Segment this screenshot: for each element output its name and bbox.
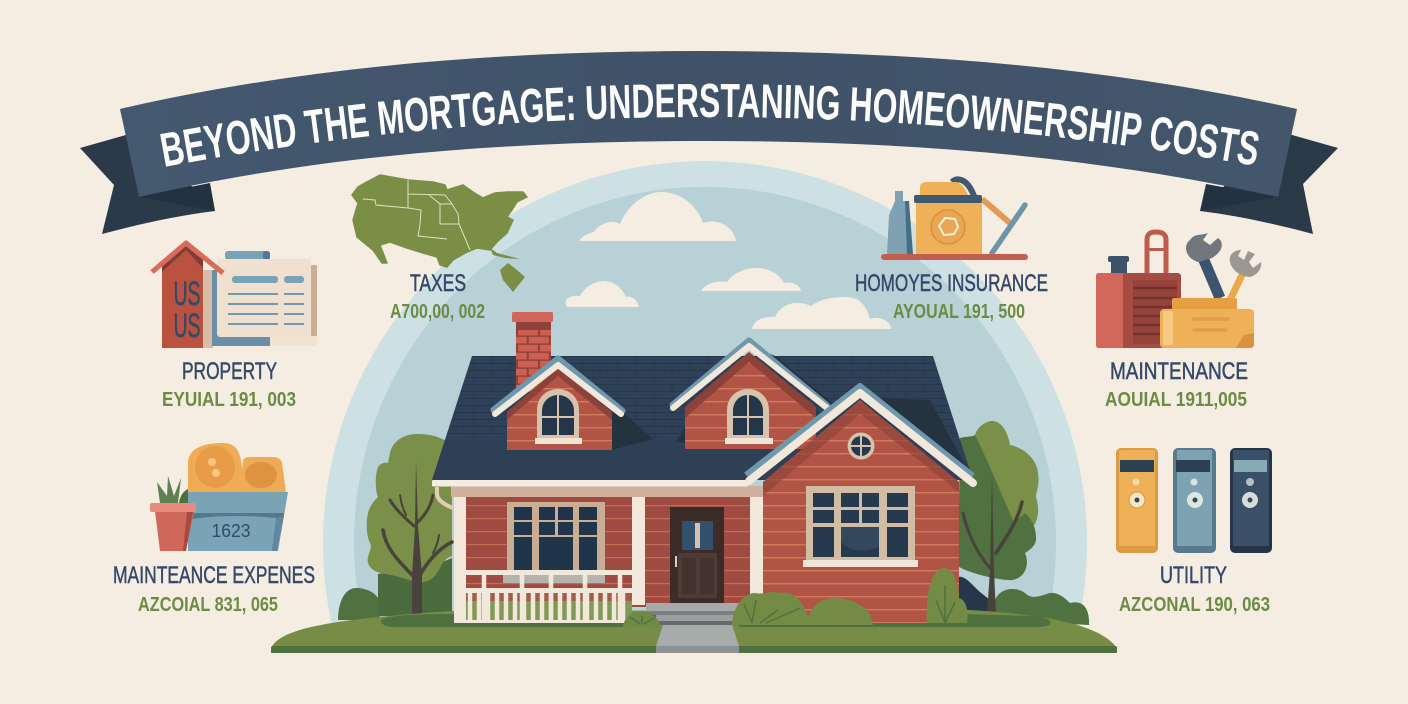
small shrub (623, 612, 660, 627)
heading: UTILITY (1160, 562, 1227, 589)
left ribbon tail (80, 131, 215, 234)
heading: TAXES (410, 270, 466, 297)
ground (271, 610, 1117, 653)
house (432, 312, 973, 625)
right ribbon tail (1200, 131, 1338, 234)
porch posts (454, 497, 763, 623)
cloud 3 (701, 268, 801, 291)
front shrubs (623, 568, 968, 627)
green bushes (995, 589, 1089, 625)
heading: PROPERTY (182, 358, 277, 385)
meter yellow (1116, 448, 1158, 553)
text: taxes (390, 270, 485, 323)
tree crown (367, 434, 452, 582)
porch wall (466, 497, 751, 607)
value: AZCOIAL 831, 065 (138, 594, 278, 616)
icon: utility meters (1116, 448, 1272, 553)
cloud 2 (566, 281, 639, 307)
heading: HOMOYES INSURANCE (855, 270, 1048, 297)
far bush (338, 588, 380, 620)
meter navy (1230, 448, 1272, 553)
value: AZCONAL 190, 063 (1119, 594, 1270, 616)
gable window (803, 486, 918, 567)
gable trim (746, 386, 973, 483)
text: maintenance (1105, 358, 1248, 411)
right tree and bushes (958, 421, 1089, 625)
box number: 1623 (212, 521, 250, 541)
value: AYOUAL 191, 500 (893, 301, 1025, 323)
round window (848, 432, 874, 460)
tall shrub (927, 568, 968, 623)
walkway (656, 625, 739, 653)
clouds (566, 192, 891, 329)
porch railing (454, 570, 644, 623)
left dormer (494, 359, 622, 450)
gable wall (763, 400, 959, 623)
roof (432, 356, 973, 480)
steps (646, 603, 741, 625)
chimney (512, 312, 553, 392)
value: AOUIAL 1911,005 (1105, 389, 1247, 411)
value: A700,00, 002 (390, 301, 485, 323)
dark foliage (378, 558, 452, 616)
title: BEYOND THE MORTGAGE: UNDERSTANING HOMEOWNERSHIP COSTS (160, 84, 1259, 167)
navy bush (958, 577, 990, 615)
right dormer window (725, 389, 773, 444)
left dormer window (535, 389, 582, 444)
value: EYUIAL 191, 003 (162, 389, 296, 411)
light crown (975, 421, 1039, 530)
banner body (120, 51, 1297, 197)
icon: property (152, 243, 317, 348)
text: expenses (113, 562, 315, 616)
icon: map (352, 175, 527, 292)
door (670, 507, 724, 603)
heading: MAINTEANCE EXPENES (113, 562, 315, 589)
right dormer (673, 341, 827, 449)
tree trunk (383, 460, 452, 615)
text: utility (1119, 562, 1270, 616)
text: property (162, 358, 296, 411)
cloud 4 (752, 297, 891, 329)
heading: MAINTENANCE (1110, 358, 1248, 385)
tree trunk (963, 473, 1022, 615)
cloud 1 (579, 192, 736, 241)
icon: insurance (881, 179, 1028, 260)
text: insurance (855, 270, 1048, 323)
US label: US (174, 275, 200, 313)
sky dome (323, 161, 1087, 630)
meter blue (1173, 448, 1216, 553)
wide shrub (732, 592, 873, 625)
icon: maintenance (1096, 232, 1261, 348)
title banner (80, 51, 1338, 234)
dark crown (958, 435, 1036, 580)
porch window (507, 502, 605, 574)
US label: US (174, 307, 200, 345)
icon: expenses (150, 443, 288, 551)
porch beam (432, 480, 763, 497)
downspout (437, 487, 453, 508)
left trees and bushes (338, 434, 452, 620)
